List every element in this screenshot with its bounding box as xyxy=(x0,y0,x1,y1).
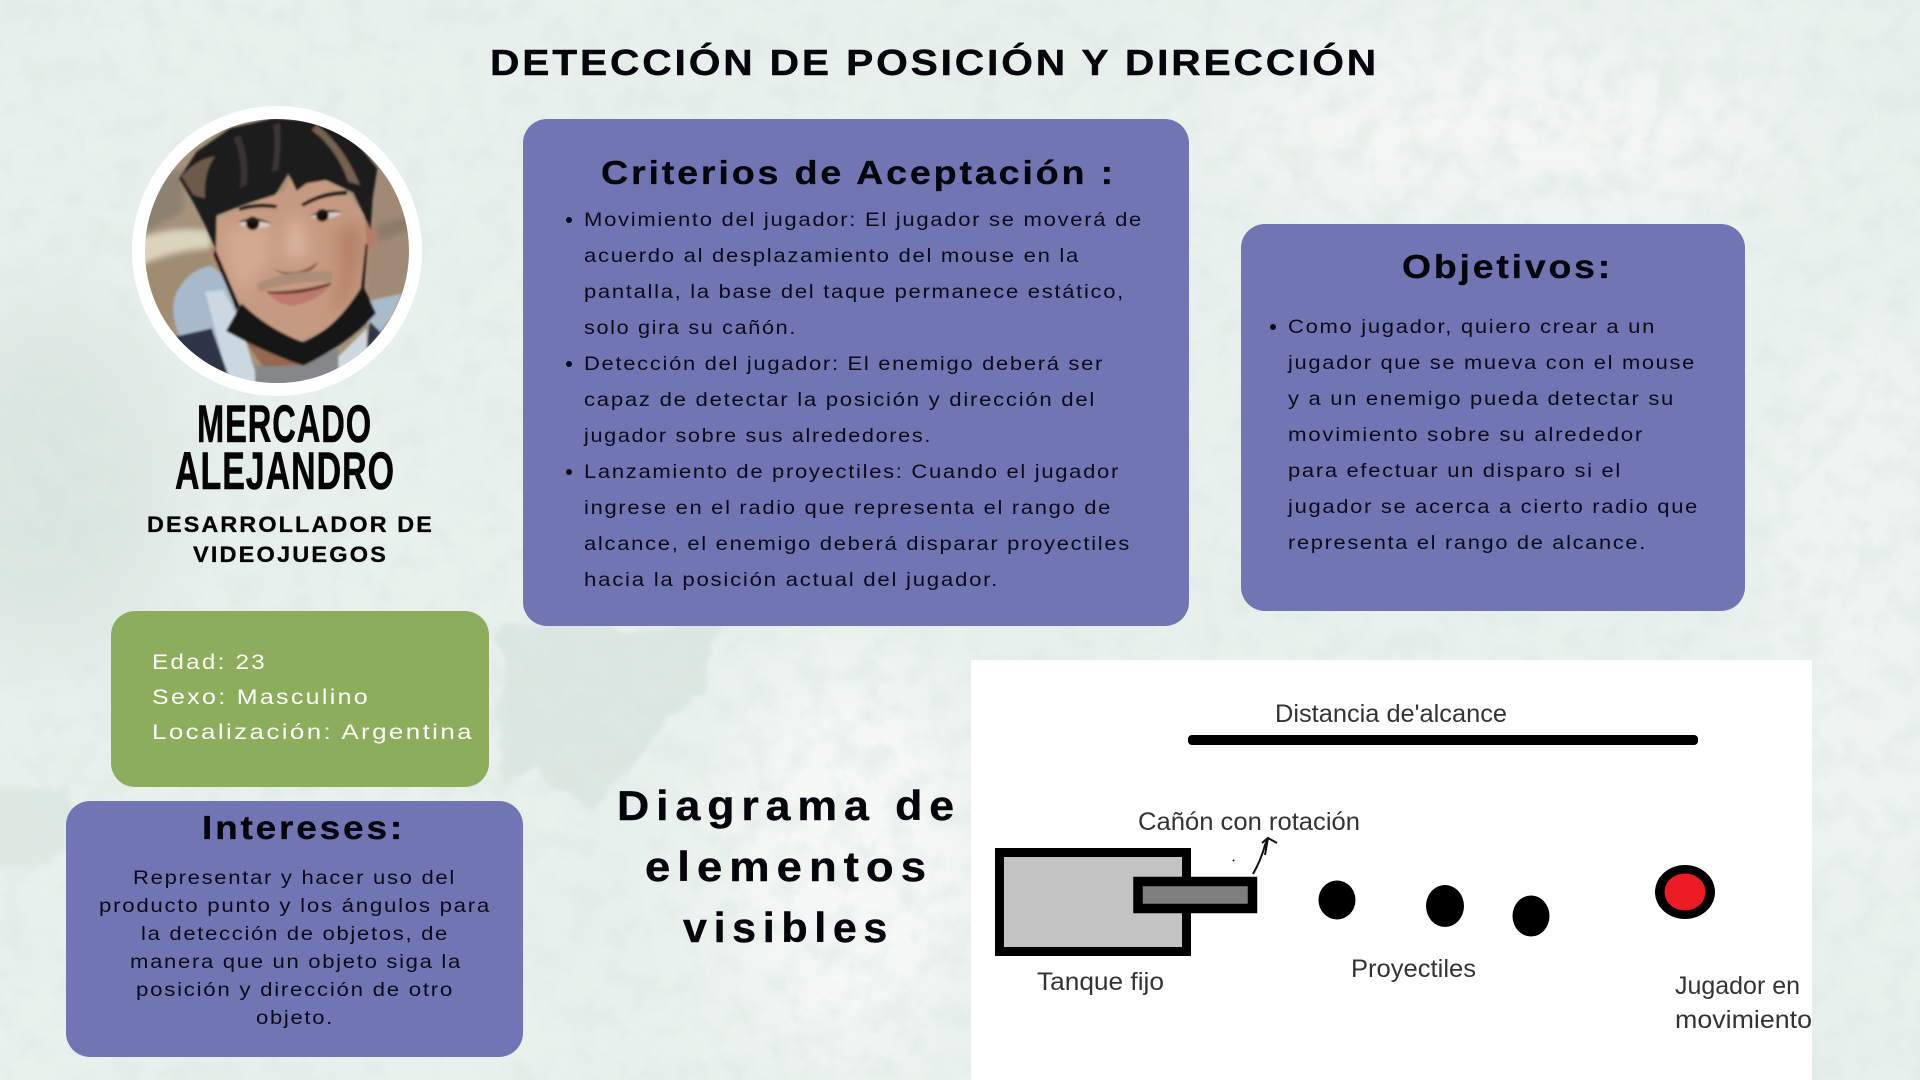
list: criterios: ingrese en el radio que representa el rango de xyxy=(584,497,1112,519)
label: jugador en movimiento xyxy=(1675,972,1812,1034)
list: criterios: Detección del jugador: El enemigo deberá ser xyxy=(584,353,1104,375)
label: distancia de alcance: Distancia de'alcance xyxy=(1275,700,1507,728)
brows xyxy=(238,204,277,211)
role xyxy=(147,512,434,567)
heading: criterios: Criterios de Aceptación : xyxy=(601,154,1116,191)
label: jugador en movimiento: movimiento xyxy=(1675,1006,1812,1034)
player xyxy=(1655,865,1715,919)
list: criterios: solo gira su cañón. xyxy=(584,317,797,339)
label: tanque fijo: Tanque fijo xyxy=(1037,968,1164,996)
eyes xyxy=(237,219,272,228)
heading: objetivos: Objetivos: xyxy=(1402,248,1613,285)
profile photo xyxy=(132,106,422,396)
sweater xyxy=(255,348,338,388)
text: intereses: objeto. xyxy=(256,1007,334,1029)
list: criterios xyxy=(566,209,1143,591)
heading: diagrama de elementos visibles: Diagrama de xyxy=(617,782,961,829)
face xyxy=(215,165,367,342)
heading: diagrama de elementos visibles xyxy=(617,782,961,951)
role: DESARROLLADOR DE xyxy=(147,512,434,537)
heading: diagrama de elementos visibles: elementos xyxy=(645,843,933,890)
text: intereses: la detección de objetos, de xyxy=(141,923,449,945)
projectiles xyxy=(1318,880,1550,936)
list: objetivos: jugador se acerca a cierto radio que xyxy=(1287,496,1699,518)
nose xyxy=(273,262,318,275)
hoodie xyxy=(172,264,238,356)
list: criterios: acuerdo al desplazamiento del mouse en la xyxy=(584,245,1080,267)
text: intereses: Representar y hacer uso del xyxy=(133,867,456,889)
panel: demographics: Sexo: Masculino xyxy=(152,685,370,709)
list: objetivos: Como jugador, quiero crear a un xyxy=(1288,316,1656,338)
list: criterios: hacia la posición actual del jugador. xyxy=(584,569,999,591)
panel: criterios de aceptación xyxy=(523,119,1189,626)
text: intereses xyxy=(99,867,491,1029)
tank base xyxy=(1000,852,1186,952)
text: intereses: producto punto y los ángulos para xyxy=(99,895,491,917)
list: criterios: pantalla, la base del taque permanece estático, xyxy=(584,281,1125,303)
list: criterios: capaz de detectar la posición y dirección del xyxy=(584,389,1096,411)
name: MERCADO xyxy=(197,395,372,454)
label: proyectiles: Proyectiles xyxy=(1351,955,1476,983)
text: intereses: manera que un objeto siga la xyxy=(130,951,462,973)
stubble xyxy=(257,271,333,292)
diagram: game elements xyxy=(971,660,1812,1080)
label: cañón con rotación: Cañón con rotación xyxy=(1138,808,1360,836)
ears xyxy=(366,222,375,252)
icon: rotation arrow xyxy=(1233,838,1277,874)
list: objetivos: jugador que se mueva con el mouse xyxy=(1287,352,1696,374)
list: objetivos: movimiento sobre su alrededor xyxy=(1288,424,1644,446)
list: objetivos xyxy=(1270,316,1699,554)
tank cannon xyxy=(1138,882,1252,908)
mask xyxy=(226,285,376,366)
list: objetivos: para efectuar un disparo si el xyxy=(1288,460,1622,482)
heading: intereses: Intereses: xyxy=(202,809,405,846)
panel: demographics xyxy=(111,611,489,787)
label: jugador en movimiento: Jugador en xyxy=(1675,972,1800,1000)
list: objetivos: y a un enemigo pueda detectar su xyxy=(1288,388,1675,410)
role: VIDEOJUEGOS xyxy=(193,542,388,567)
name xyxy=(175,395,395,501)
range bar xyxy=(1188,735,1698,745)
hair xyxy=(179,118,377,250)
panel: demographics: Edad: 23 xyxy=(152,650,267,674)
text: intereses: posición y dirección de otro xyxy=(136,979,454,1001)
lips xyxy=(268,285,330,306)
list: criterios: alcance, el enemigo deberá disparar proyectiles xyxy=(584,533,1131,555)
list: criterios: jugador sobre sus alrededores. xyxy=(583,425,932,447)
list: criterios: Lanzamiento de proyectiles: Cuando el jugador xyxy=(584,461,1120,483)
face shading xyxy=(223,218,363,315)
heading: diagrama de elementos visibles: visibles xyxy=(683,904,894,951)
panel: intereses xyxy=(66,801,523,1057)
list: criterios: Movimiento del jugador: El jugador se moverá de xyxy=(584,209,1143,231)
panel: objetivos xyxy=(1241,224,1745,611)
name: ALEJANDRO xyxy=(175,442,395,501)
panel: demographics: Localización: Argentina xyxy=(152,720,474,744)
neck xyxy=(246,340,311,368)
list: objetivos: representa el rango de alcance. xyxy=(1288,532,1647,554)
title: DETECCIÓN DE POSICIÓN Y DIRECCIÓN xyxy=(490,41,1379,83)
